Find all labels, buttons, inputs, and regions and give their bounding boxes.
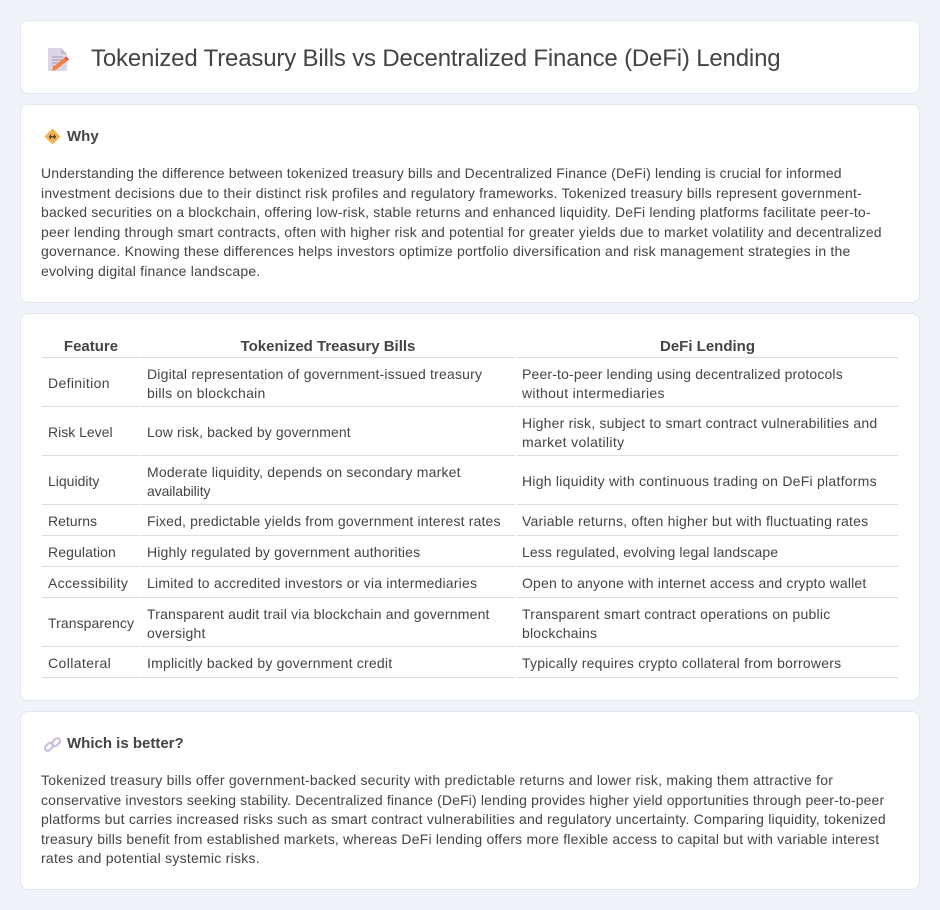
row: regulation: Highly regulated by government authorities — [147, 544, 420, 560]
icon: document with pencil — [48, 48, 70, 71]
which is better paragraph: treasury bills benefit from established markets, whereas DeFi lending offers more flexible access to capital but with variable interest — [41, 831, 879, 847]
panel: title — [20, 20, 920, 94]
row: collateral: Typically requires crypto collateral from borrowers — [522, 655, 841, 671]
row: definition: without intermediaries — [522, 385, 665, 401]
row: transparency: Transparency — [48, 615, 134, 631]
which is better paragraph: platforms but carries increased risks such as smart contract vulnerabilities and regulatory uncertainty. Comparing liquidity, tokenized — [41, 811, 886, 827]
row: definition: bills on blockchain — [147, 385, 266, 401]
row: risk level: Higher risk, subject to smart contract vulnerabilities and — [522, 415, 877, 431]
title text: Tokenized Treasury Bills vs Decentralized Finance (DeFi) Lending — [91, 45, 780, 72]
icon: chain link — [44, 737, 61, 752]
row: transparency: oversight — [147, 625, 206, 641]
row: definition: Digital representation of government-issued treasury — [147, 366, 482, 382]
table header: Tokenized Treasury Bills — [241, 338, 415, 355]
which is better paragraph: conservative investors seeking stability. Decentralized finance (DeFi) lending provides higher yield opportunities through peer-to-peer — [41, 792, 884, 808]
which is better heading: Which is better? — [67, 735, 184, 752]
row: liquidity: Moderate liquidity, depends on secondary market — [147, 464, 461, 480]
table header: DeFi Lending — [660, 338, 755, 355]
row: risk level — [48, 415, 877, 450]
why heading: Why — [67, 128, 99, 145]
row: collateral: Collateral — [48, 655, 111, 671]
row: regulation: Regulation — [48, 544, 116, 560]
row: collateral: Implicitly backed by government credit — [147, 655, 392, 671]
table header — [64, 338, 755, 355]
row: liquidity: availability — [147, 483, 210, 499]
why paragraph: backed securities on a blockchain, offering low-risk, stable returns and enhanced liquidity. DeFi lending platforms facilitate peer-to- — [41, 204, 871, 220]
why paragraph: peer lending through smart contracts, often with higher risk and potential for greater yields due to market volatility and decentralized — [41, 224, 882, 240]
why paragraph: evolving digital finance landscape. — [41, 263, 260, 279]
row: returns — [48, 513, 868, 529]
panel: which is better — [20, 711, 920, 890]
row: accessibility: Open to anyone with internet access and crypto wallet — [522, 575, 866, 591]
row: liquidity: Liquidity — [48, 473, 99, 489]
row: definition — [48, 366, 843, 401]
row: collateral — [48, 655, 841, 671]
row: transparency: Transparent audit trail via blockchain and government — [147, 606, 490, 622]
panel: comparison table — [20, 313, 920, 701]
row: definition: Definition — [48, 375, 110, 391]
why paragraph: investment decisions due to their distinct risk profiles and regulatory frameworks. Tokenized treasury bills represent government- — [41, 185, 862, 201]
row: regulation: Less regulated, evolving legal landscape — [522, 544, 778, 560]
which is better paragraph: rates and potential systemic risks. — [41, 850, 260, 866]
row: returns: Fixed, predictable yields from government interest rates — [147, 513, 501, 529]
row: transparency: blockchains — [522, 625, 597, 641]
why paragraph: governance. Knowing these differences helps investors optimize portfolio diversification and risk management strategies in the — [41, 243, 851, 259]
panel: why — [20, 104, 920, 303]
table header: Feature — [64, 338, 118, 355]
row: accessibility — [48, 575, 866, 591]
row: transparency: Transparent smart contract operations on public — [522, 606, 830, 622]
row: definition: Peer-to-peer lending using decentralized protocols — [522, 366, 843, 382]
which is better paragraph — [41, 772, 886, 866]
which is better paragraph: Tokenized treasury bills offer government-backed security with predictable returns and lower risk, making them attractive for — [41, 772, 833, 788]
row: accessibility: Limited to accredited investors or via intermediaries — [147, 575, 477, 591]
why paragraph: Understanding the difference between tokenized treasury bills and Decentralized Finance (DeFi) lending is crucial for informed — [41, 165, 842, 181]
row: returns: Variable returns, often higher but with fluctuating rates — [522, 513, 868, 529]
row: risk level: market volatility — [522, 434, 624, 450]
icon: diamond sign — [45, 129, 60, 144]
row: accessibility: Accessibility — [48, 575, 128, 591]
row: liquidity — [48, 464, 877, 499]
why paragraph — [41, 165, 882, 279]
row: returns: Returns — [48, 513, 97, 529]
row: regulation — [48, 544, 778, 560]
row: risk level: Risk Level — [48, 424, 113, 440]
row: liquidity: High liquidity with continuous trading on DeFi platforms — [522, 473, 877, 489]
row: risk level: Low risk, backed by government — [147, 424, 351, 440]
row: transparency — [48, 606, 830, 641]
